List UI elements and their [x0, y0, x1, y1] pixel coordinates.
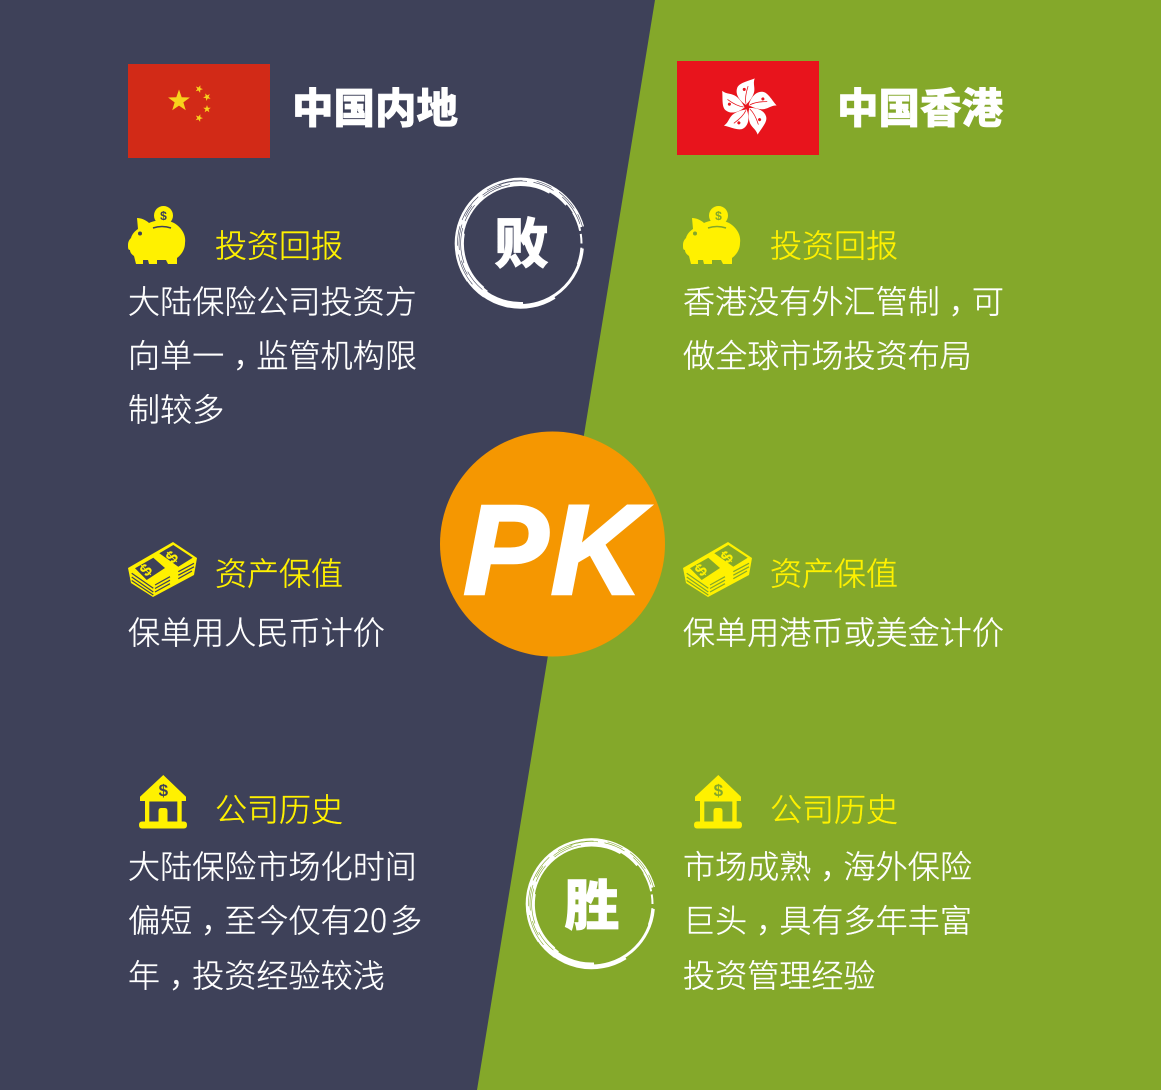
panel: Hong Kong asset preservation: [683, 542, 1004, 651]
icon: piggy bank: [683, 206, 740, 264]
flag: Hong Kong: [677, 61, 819, 155]
heading: investment return: 投资回报: [215, 228, 343, 264]
icon: house with dollar: [694, 775, 742, 828]
heading: asset preservation: 资产保值: [215, 556, 343, 592]
text: Hong Kong company history: 市场成熟 ，海外保险: [683, 849, 972, 885]
icon: banknotes: [683, 542, 752, 597]
heading: asset preservation: 资产保值: [770, 556, 898, 592]
badge: win: 胜: [564, 875, 620, 937]
badge: lose: 败: [494, 213, 549, 275]
text: mainland company history: 年 ，投资经验较浅: [128, 958, 385, 994]
text: Hong Kong investment return: 做全球市场投资布局: [683, 338, 972, 374]
panel: Hong Kong investment return: [683, 206, 1004, 374]
text: Hong Kong investment return: 香港没有外汇管制 ，可: [683, 284, 1004, 320]
background: navy left panel: [0, 0, 655, 1090]
panel: Hong Kong company history: [683, 775, 972, 994]
heading: investment return: 投资回报: [770, 228, 898, 264]
text: mainland investment return: 制较多: [128, 392, 224, 428]
icon: piggy bank: [128, 206, 185, 264]
text: mainland investment return: 向单一 ，监管机构限: [128, 338, 417, 374]
text: mainland company history: 大陆保险市场化时间: [128, 849, 417, 885]
heading: company history: 公司历史: [215, 792, 343, 828]
badge: win: [501, 813, 682, 995]
flag: mainland China: [128, 64, 270, 158]
badge: lose: [430, 153, 611, 334]
panel: mainland company history: [128, 775, 422, 994]
panel: mainland investment return: [128, 206, 417, 428]
text: Hong Kong asset preservation: 保单用港币或美金计价: [683, 615, 1004, 651]
text: mainland company history: 偏短 ，至今仅有20多: [128, 896, 422, 942]
PK badge: PK: [463, 479, 651, 622]
text: Hong Kong company history: 巨头 ，具有多年丰富: [683, 903, 972, 939]
text: mainland asset preservation: 保单用人民币计价: [128, 615, 385, 651]
icon: banknotes: [128, 542, 197, 597]
title: mainland China: 中国内地: [292, 85, 458, 132]
text: mainland investment return: 大陆保险公司投资方: [128, 284, 417, 320]
text: Hong Kong company history: 投资管理经验: [683, 958, 876, 994]
heading: company history: 公司历史: [770, 792, 898, 828]
title: Hong Kong: 中国香港: [837, 85, 1004, 132]
panel: mainland asset preservation: [128, 542, 385, 651]
PK badge: [440, 432, 665, 656]
icon: house with dollar: [139, 775, 187, 828]
